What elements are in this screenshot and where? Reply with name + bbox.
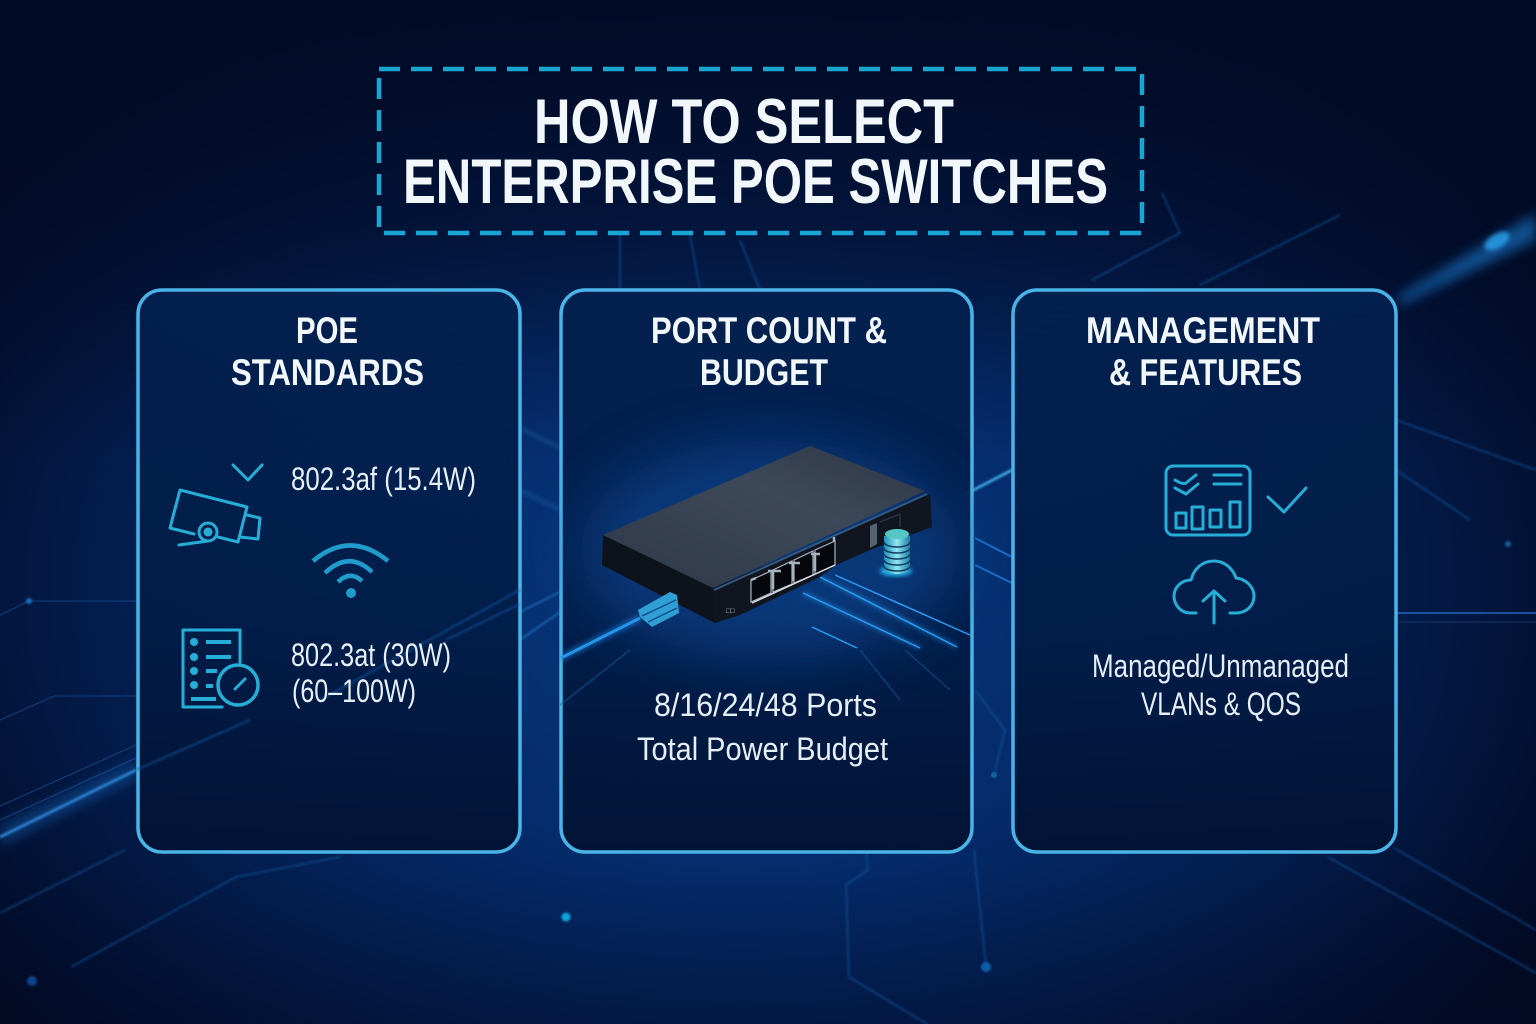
background streak: between cards floor — [975, 538, 1012, 583]
switch backdrop glow — [580, 440, 960, 660]
switch front — [713, 494, 932, 623]
background thin lines left side — [0, 601, 136, 820]
text: port options — [637, 687, 888, 767]
coin cylinder — [884, 536, 910, 574]
connector shading — [642, 600, 677, 622]
icon: check chevron — [233, 465, 262, 480]
icon: check mark — [1268, 488, 1306, 512]
text: management options: VLANs & QOS — [1141, 686, 1301, 722]
icon: wifi — [313, 546, 388, 598]
panel: port count and budget — [560, 290, 972, 852]
floor trace glow — [803, 577, 957, 648]
background node dots — [26, 541, 1511, 986]
title text second line: ENTERPRISE POE SWITCHES — [403, 147, 1108, 217]
connector — [638, 592, 679, 627]
coin glow — [880, 566, 912, 576]
faint streaks inside panel — [136, 590, 520, 770]
illustration: PoE switch — [602, 446, 932, 623]
background glow streak: upper right — [1397, 213, 1536, 305]
background glow: lower left — [0, 760, 136, 846]
coin top — [885, 529, 909, 539]
background thin lines right side — [1396, 621, 1536, 623]
status label: □□ — [726, 608, 735, 615]
panel heading — [231, 310, 424, 393]
panel heading: STANDARDS — [231, 352, 424, 393]
text: 802.3at: 802.3at (30W) — [291, 637, 451, 673]
text: 802.3at: (60–100W) — [292, 673, 416, 709]
panel heading: PORT COUNT & — [651, 310, 887, 351]
panel heading — [651, 310, 887, 393]
cable — [561, 618, 640, 658]
title dashed frame — [379, 69, 1142, 233]
switch left side — [602, 535, 715, 623]
icon: security camera — [170, 490, 260, 545]
coin bands — [884, 542, 910, 571]
switch top — [603, 446, 925, 588]
panel: PoE standards — [136, 290, 520, 852]
icon: checklist with gauge — [183, 630, 258, 707]
port bottom highlight — [752, 565, 835, 603]
side port outline — [880, 514, 900, 527]
background streak: between cards left upper — [520, 592, 560, 640]
text: management options: Managed/Unmanaged — [1092, 648, 1349, 684]
background streak: between cards right — [962, 470, 1012, 496]
title box — [379, 69, 1142, 233]
background streak: between cards left — [520, 428, 560, 510]
background glow spot: upper right — [1481, 228, 1513, 254]
panel heading — [1086, 310, 1320, 393]
icon: cable and connector — [561, 592, 679, 658]
panel frame — [1013, 290, 1396, 852]
background streak: lower left — [0, 770, 136, 837]
text: port options: 8/16/24/48 Ports — [654, 687, 877, 723]
top edge highlight — [714, 494, 927, 590]
icon: dashboard — [1166, 466, 1250, 535]
faint floor circuitry — [560, 650, 950, 705]
panel heading: BUDGET — [700, 352, 828, 393]
title text: HOW TO SELECT — [534, 87, 954, 157]
port latches — [751, 537, 834, 589]
panel heading: POE — [296, 310, 358, 351]
text: management options — [1092, 648, 1349, 722]
icon: coin stack — [880, 529, 912, 576]
cable glow — [561, 618, 640, 658]
icon: cloud upload — [1174, 561, 1254, 623]
panel frame — [138, 290, 520, 852]
text: port options: Total Power Budget — [637, 731, 888, 767]
panel heading: MANAGEMENT — [1086, 310, 1320, 351]
port sockets — [751, 541, 835, 602]
side port slot — [870, 523, 877, 548]
text: 802.3af: 802.3af (15.4W) — [291, 461, 476, 497]
floor traces under switch — [803, 575, 970, 648]
panel heading: & FEATURES — [1109, 352, 1302, 393]
panel: management and features — [1013, 290, 1396, 852]
background line right side — [1396, 612, 1536, 614]
text: 802.3at — [291, 637, 451, 709]
panel frame — [561, 290, 972, 852]
